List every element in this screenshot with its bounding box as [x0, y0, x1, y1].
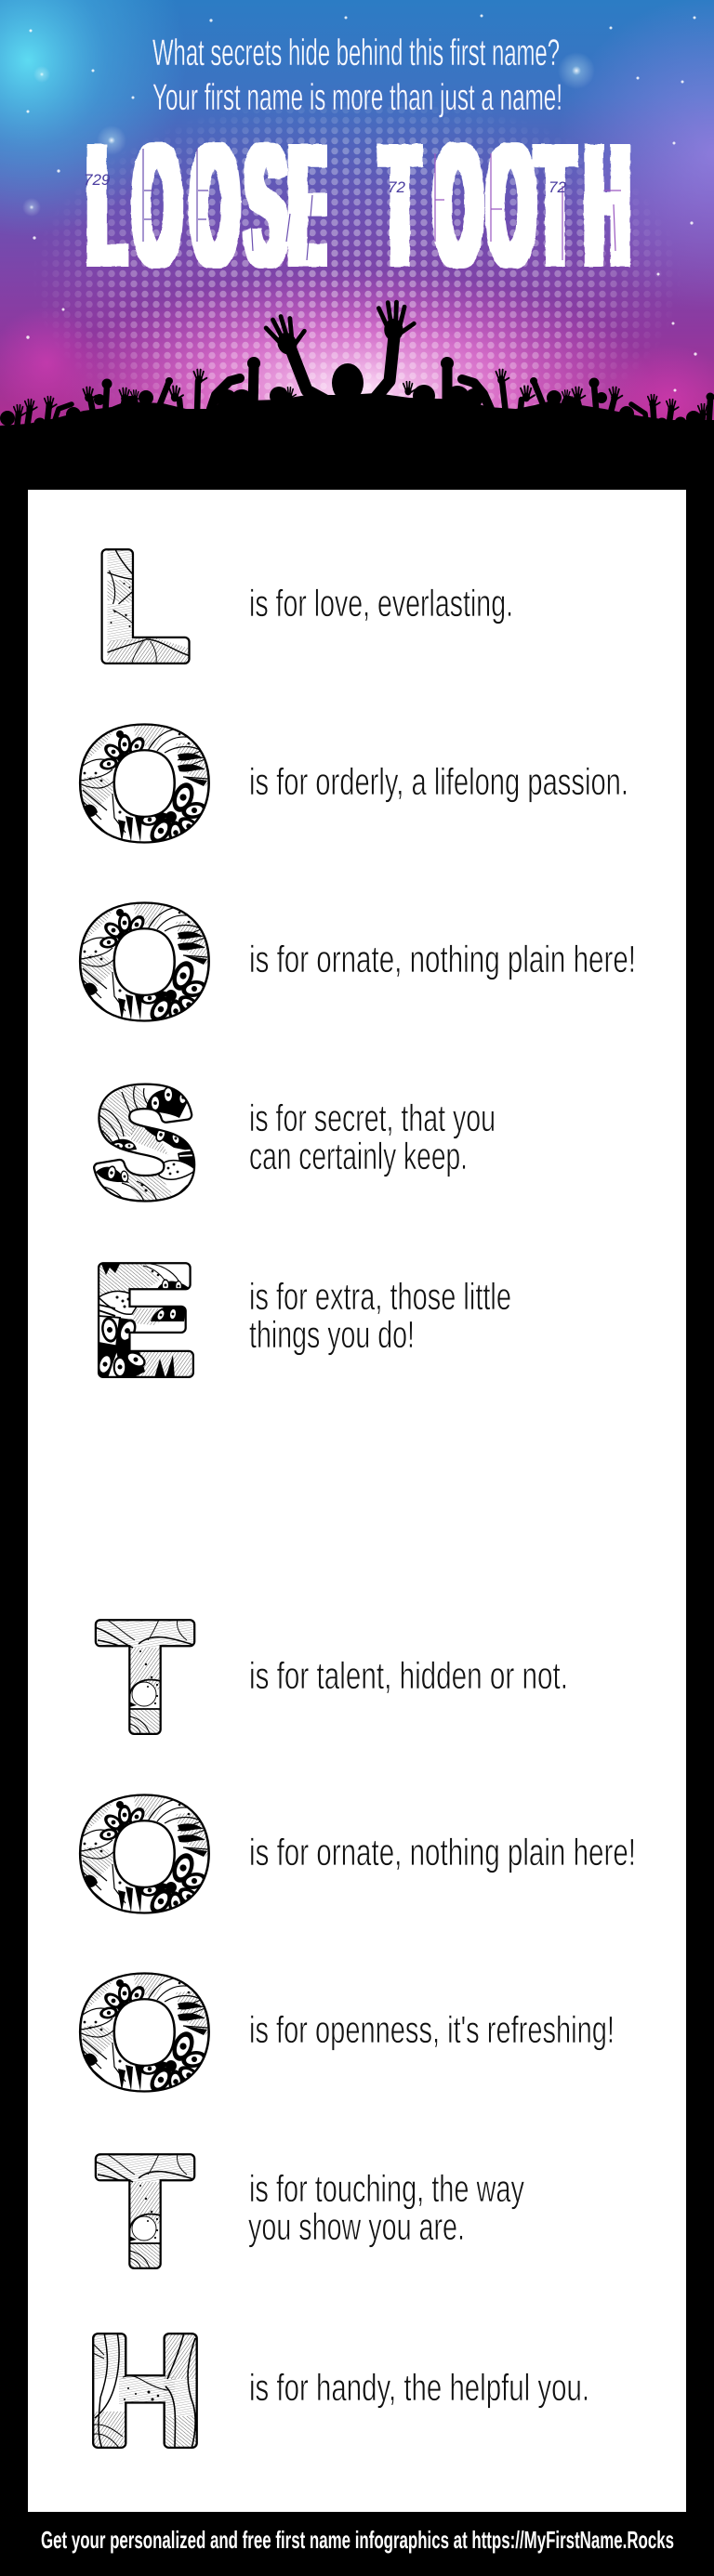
row: E [97, 1262, 510, 1378]
letter S: S [94, 1058, 196, 1228]
letter T [95, 2153, 195, 2269]
letter L: L [97, 521, 190, 691]
letter T: T [99, 1592, 192, 1762]
letter O [78, 1972, 210, 2093]
row: H [92, 2333, 588, 2449]
title: LOOSE TOOTH: 72 [549, 178, 566, 196]
letter O [78, 1794, 210, 1914]
title: LOOSE TOOTH: 729 [84, 171, 111, 189]
row: T touching [89, 2126, 524, 2296]
row: O openness [77, 1946, 615, 2119]
row: T talent [89, 1592, 568, 1762]
text: is for extra, those little [249, 1275, 511, 1318]
letter H [92, 2333, 198, 2449]
title: LOOSE TOOTH: LOOSE TOOTH [88, 110, 628, 302]
text [249, 1097, 496, 1177]
letter O: O [77, 1768, 212, 1940]
letter O: O [77, 697, 212, 870]
letter O: O [77, 1946, 212, 2119]
text: is for talent, hidden or not. [249, 1654, 568, 1697]
white panel [28, 490, 686, 2512]
text [249, 1275, 511, 1356]
text: is for secret, that you [249, 1097, 496, 1139]
row: L [97, 521, 513, 691]
title: LOOSE TOOTH [86, 141, 630, 269]
row: O ornate 2 [77, 1768, 636, 1940]
text: is for love, everlasting. [249, 582, 513, 624]
letter O [78, 901, 210, 1022]
letter O: O [77, 875, 212, 1048]
title: LOOSE TOOTH: 72 [388, 178, 405, 196]
letter T: T [99, 2126, 192, 2296]
letter E [97, 1262, 194, 1378]
row: O ornate [77, 875, 636, 1048]
letter T [95, 1619, 195, 1735]
text [248, 2167, 524, 2248]
crowd silhouette [0, 301, 714, 490]
letter L [100, 548, 191, 664]
row: O orderly [77, 697, 628, 870]
text: things you do! [249, 1313, 415, 1356]
text: you show you are. [248, 2205, 465, 2248]
letter O [78, 723, 210, 844]
letter S [93, 1084, 195, 1203]
row: S [89, 1058, 496, 1228]
header: concert background [0, 0, 714, 426]
text: is for handy, the helpful you. [249, 2366, 589, 2409]
text: is for touching, the way [249, 2167, 524, 2210]
letter H: H [87, 2306, 203, 2476]
letter E: E [93, 1235, 194, 1405]
text: can certainly keep. [249, 1135, 468, 1177]
